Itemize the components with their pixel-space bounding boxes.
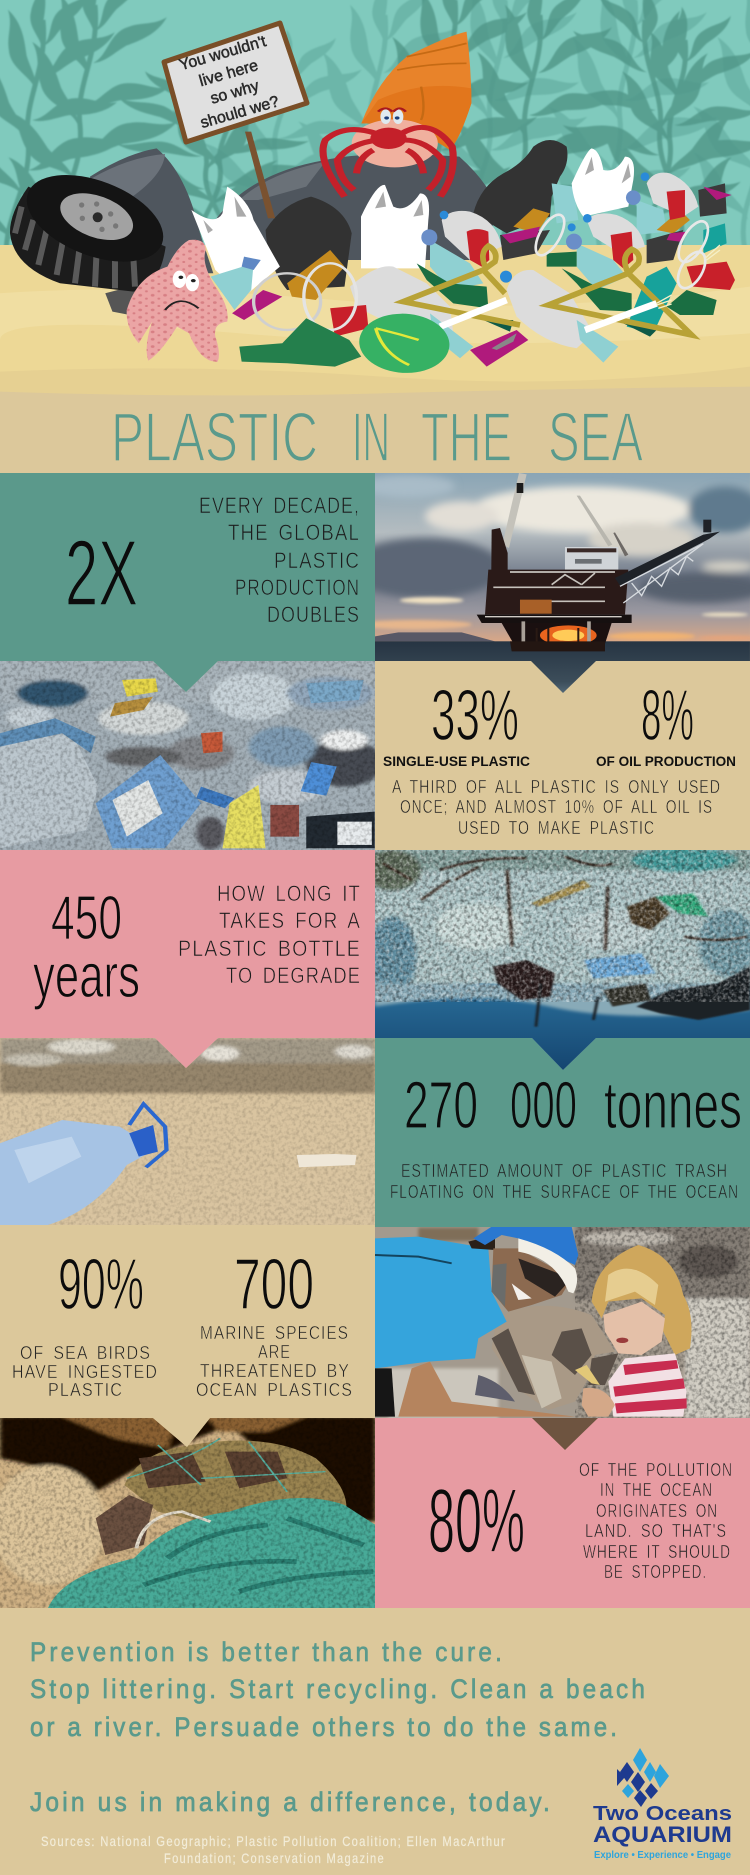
logo: Two Oceans Aquarium: Two Oceans	[593, 1803, 732, 1825]
icon: tyre	[10, 158, 175, 292]
text: of the pollution: BE STOPPED.	[604, 1562, 707, 1582]
text: marine species: MARINE SPECIES	[200, 1323, 349, 1343]
stat: 33%: 33%	[431, 676, 519, 756]
logo: Two Oceans Aquarium: Explore • Experience • Engage	[594, 1850, 731, 1861]
call to action text: Stop littering. Start recycling. Clean a beach	[30, 1674, 648, 1704]
text: every decade: THE GLOBAL	[228, 520, 360, 545]
text: every decade	[199, 493, 360, 627]
text: every decade: EVERY DECADE,	[199, 493, 360, 518]
logo: Two Oceans Aquarium: AQUARIUM	[593, 1822, 732, 1847]
text: how long it takes: TAKES FOR A	[219, 908, 361, 933]
text: marine species: OCEAN PLASTICS	[196, 1380, 353, 1400]
panel: tan stats background with 33% and 8%	[375, 661, 750, 850]
text: of sea birds: OF SEA BIRDS	[20, 1343, 151, 1363]
label: single-use plastic: SINGLE-USE PLASTIC	[383, 754, 530, 769]
stat: 270 000 tonnes	[404, 1068, 742, 1143]
sand	[0, 245, 750, 433]
callout pointer: teal	[153, 661, 218, 692]
label: of oil production: OF OIL PRODUCTION	[596, 754, 736, 769]
text: of the pollution: IN THE OCEAN	[600, 1480, 713, 1500]
icon: left rock	[90, 148, 213, 273]
stat: 8%: 8%	[641, 676, 694, 756]
stat: 80%: 80%	[428, 1471, 525, 1572]
rings, bottle and debris at left of pile	[211, 250, 368, 337]
stat: 450 years	[33, 884, 140, 1011]
icon: sad starfish	[127, 240, 228, 362]
title: THE	[421, 398, 512, 476]
white plastic bag	[191, 187, 280, 297]
sign: You wouldn't live here: should we?	[199, 93, 281, 132]
callout pointer: pink	[155, 1038, 218, 1068]
title: IN	[352, 398, 390, 476]
sign: You wouldn't live here	[164, 23, 307, 142]
stat: 2X: 2X	[65, 521, 138, 625]
icon: flip flop	[347, 305, 461, 382]
sources	[41, 1833, 506, 1866]
sources: Foundation; Conservation Magazine	[164, 1850, 385, 1866]
text: how long it takes: TO DEGRADE	[226, 963, 361, 988]
stat: 270 000 tonnes: 270	[404, 1068, 478, 1143]
stat: 700: 700	[234, 1245, 314, 1325]
text: how long it takes	[178, 881, 361, 988]
text: of sea birds: PLASTIC	[48, 1380, 123, 1400]
sign post	[245, 132, 275, 218]
hero illustration	[0, 0, 750, 433]
photo: debris floating in the ocean	[364, 848, 750, 1083]
photo: pile of plastic bottles	[0, 661, 383, 850]
text: marine species	[196, 1323, 353, 1400]
call to action text	[30, 1637, 648, 1817]
stat: 450 years: 450	[51, 884, 122, 953]
text: estimated amount	[390, 1161, 739, 1202]
text: a third of all plastic: USED TO MAKE PLASTIC	[458, 818, 655, 838]
panel: 2X production	[0, 473, 375, 661]
rock behind crab	[105, 154, 498, 317]
oil rig structure	[477, 473, 720, 651]
text: of the pollution	[579, 1460, 733, 1582]
sources: Sources: National Geographic; Plastic Pollution Coalition; Ellen MacArthur	[41, 1833, 506, 1849]
text: every decade: PLASTIC	[274, 548, 360, 573]
text: of sea birds	[12, 1343, 158, 1400]
callout pointer: tan	[153, 1418, 210, 1447]
icon: fish diamond	[617, 1748, 669, 1807]
panel: 90% and 700	[0, 1227, 375, 1418]
dark trash bag	[266, 197, 352, 290]
panel: 270 000 tonnes	[375, 1038, 750, 1227]
call to action text: Prevention is better than the cure.	[30, 1637, 505, 1667]
photo: plastic bottle on beach	[0, 1038, 376, 1225]
text: of sea birds: HAVE INGESTED	[12, 1362, 158, 1382]
stat: 90%: 90%	[58, 1245, 144, 1325]
text: every decade: DOUBLES	[267, 602, 360, 627]
title: SEA	[548, 398, 643, 476]
stat: 450 years: years	[33, 942, 140, 1011]
bottle	[0, 1120, 148, 1225]
logo: Two Oceans Aquarium	[593, 1748, 732, 1861]
photo: oil rig at sunset	[375, 473, 750, 693]
sign: You wouldn't live here: You wouldn't	[177, 33, 269, 74]
text: every decade: PRODUCTION	[235, 575, 360, 600]
stat: 270 000 tonnes: 000	[510, 1068, 577, 1143]
call to action text: or a river. Persuade others to do the same.	[30, 1712, 620, 1742]
photo: woman and child on the beach	[375, 1225, 750, 1452]
plastic debris pile, right	[350, 140, 735, 367]
panel: 80%	[375, 1418, 750, 1608]
title	[111, 398, 643, 476]
icon: green glass bottle	[239, 318, 361, 367]
text: marine species: THREATENED BY	[200, 1361, 350, 1381]
text: marine species: ARE	[258, 1342, 291, 1362]
photo: turtle tangled in fishing net	[0, 1417, 376, 1608]
title: PLASTIC	[111, 398, 318, 476]
text: how long it takes: PLASTIC BOTTLE	[178, 936, 361, 961]
icon: hermit crab	[323, 32, 471, 197]
sign: You wouldn't live here: live here	[197, 57, 260, 90]
panel: 450 years	[0, 850, 375, 1038]
background kelp forest	[0, 0, 750, 270]
text: how long it takes: HOW LONG IT	[217, 881, 361, 906]
sign: You wouldn't live here: so why	[208, 78, 261, 108]
call to action text: Join us in making a difference, today.	[30, 1787, 553, 1817]
text: a third of all plastic	[392, 777, 721, 838]
